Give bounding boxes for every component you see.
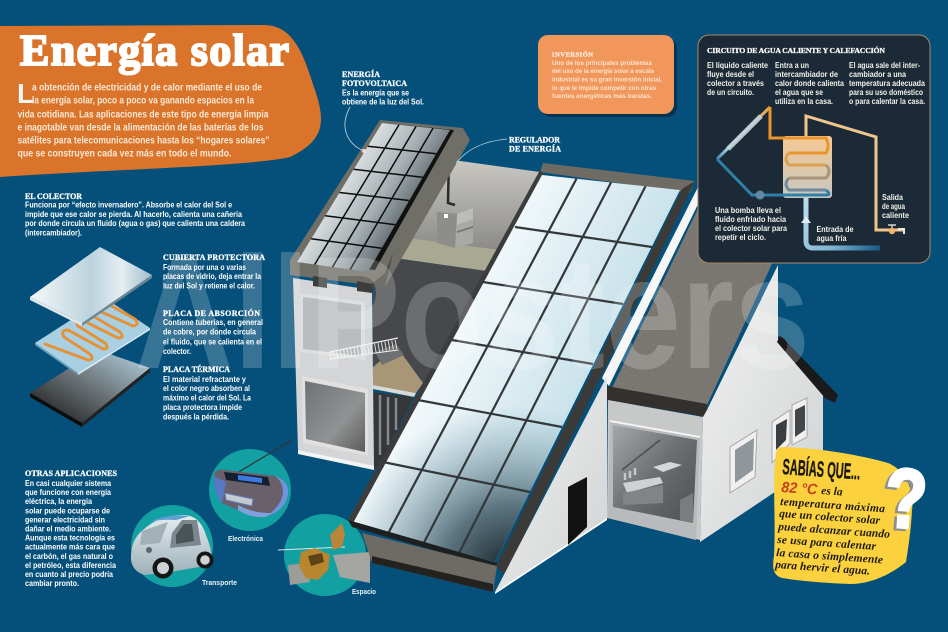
circuit diagram	[717, 107, 904, 248]
text block: otras aplicaciones: generar electricidad sin	[25, 515, 105, 524]
placa de absorción: de cobre, por donde circula	[163, 328, 256, 336]
text block: layer descriptions	[163, 253, 265, 422]
watermark: AllPosters	[135, 223, 810, 402]
text block: el colector: impide que ese calor se pierda. Al hacerlo, calienta una cañería	[25, 210, 242, 219]
cubierta protectora	[163, 253, 265, 290]
text block: otras aplicaciones: cambiar pronto.	[25, 579, 79, 588]
intro text: L	[17, 78, 34, 109]
circuit column 1: de un circuito.	[707, 88, 754, 97]
label: transporte: Transporte	[202, 578, 237, 587]
circuit column 1: colector a través	[707, 79, 765, 88]
callout text: para hervir el agua.	[774, 559, 870, 578]
placa térmica: El material refractante y	[163, 375, 246, 384]
side windows	[730, 398, 807, 493]
circuit column 1	[707, 61, 769, 97]
callout text	[774, 485, 891, 578]
text block: otras aplicaciones: actualmente más cara que	[25, 543, 115, 552]
label: bomba: el colector solar para	[715, 224, 788, 233]
panel: inversión: fuentes energéticas más baratas.	[552, 93, 652, 100]
illustration: solar house	[290, 120, 838, 594]
text block: otras aplicaciones: el petróleo, esta diferencia	[25, 561, 116, 570]
intro text: vida cotidiana. Las aplicaciones de este tipo de energía limpia	[18, 110, 269, 120]
callout: energía fotovoltaica	[342, 69, 424, 153]
large solar roof	[348, 163, 695, 592]
circuit column 3	[849, 61, 926, 106]
placa térmica: placa protectora impide	[163, 403, 242, 412]
cubierta protectora: luz del Sol y retiene el calor.	[163, 282, 255, 290]
panel: inversión: INVERSIÓN	[552, 50, 593, 58]
cubierta protectora: CUBIERTA PROTECTORA	[163, 253, 265, 262]
label: salida de agua caliente: Salida	[882, 193, 904, 202]
callout text: es la	[821, 485, 843, 499]
circuit column 2: Entra a un	[775, 61, 809, 70]
label: salida de agua caliente: caliente	[882, 211, 910, 220]
circuit column 2: utiliza en la casa.	[775, 97, 833, 106]
intro text: que se construyen cada vez más en todo el mundo.	[18, 148, 232, 160]
placa de absorción	[163, 308, 263, 356]
panel: inversión: Uno de los principales problemas	[552, 60, 652, 67]
application: electronics radio	[209, 440, 292, 531]
circuit column 1: fluye desde el	[707, 70, 754, 79]
callout text: la casa o simplemente	[776, 547, 883, 566]
question mark shadow: ?	[879, 453, 927, 549]
callout: energía fotovoltaica: obtiene de la luz del Sol.	[342, 98, 424, 106]
intro text	[17, 78, 270, 160]
cubierta protectora: Formada por una o varias	[163, 263, 246, 272]
text block: otras aplicaciones: En casi cualquier sistema	[25, 479, 111, 488]
circuit column 3: cambiador a una	[849, 70, 907, 79]
question mark: ?	[882, 451, 930, 547]
placa de absorción: colector.	[163, 347, 191, 356]
panel: inversión: lo que le impide competir con otras	[552, 85, 656, 92]
placa de absorción: Contiene tuberías, en general	[163, 318, 263, 327]
callout text: temperatura máxima	[780, 496, 886, 515]
cubierta protectora: placas de vidrio, deja entrar la	[163, 272, 261, 281]
walls and door	[495, 265, 838, 594]
intro text: la energía solar, poco a poco va ganando espacios en la	[32, 96, 254, 106]
callout: energía fotovoltaica: Es la energía que se	[342, 88, 409, 98]
placa térmica: después la pérdida.	[163, 412, 229, 422]
text block: otras aplicaciones: Aunque esta tecnología es	[25, 534, 115, 543]
label: bomba	[715, 206, 788, 242]
callout: regulador de energía: REGULADOR	[509, 136, 560, 144]
placa de absorción: el fluido, que se calienta en el	[163, 338, 262, 346]
intro text: e inagotable van desde la alimentación de las baterías de los	[18, 122, 264, 134]
label: electrónica: Electrónica	[228, 534, 264, 543]
kitchen window	[608, 420, 700, 540]
placa de absorción: PLACA DE ABSORCIÓN	[163, 308, 260, 318]
callout text: se usa para calentar	[776, 534, 877, 553]
label: salida de agua caliente	[882, 193, 910, 220]
panel: inversión: del uso de la energía solar a escala	[552, 68, 654, 75]
label: entrada de agua fría: agua fría	[816, 234, 847, 243]
circuit column 1: El líquido caliente	[707, 61, 769, 70]
protective cover	[30, 247, 152, 326]
text block: otras aplicaciones: dañar el medio ambiente.	[25, 524, 111, 534]
label: salida de agua caliente: de agua	[882, 202, 906, 211]
placa térmica: PLACA TÉRMICA	[163, 364, 230, 374]
left wall with windows	[293, 278, 374, 470]
callout text: que un colector solar	[779, 508, 881, 527]
text block: otras aplicaciones: que funcione con energía	[25, 488, 111, 497]
circuit column 3: temperatura adecuada	[849, 79, 926, 88]
circuit column 3: El agua sale del inter-	[849, 61, 920, 70]
panel: circuito de agua caliente	[698, 35, 930, 263]
text block: otras aplicaciones: en cuanto al precio podría	[25, 570, 113, 579]
callout text: puede alcanzar cuando	[777, 521, 891, 541]
panel: inversión: industrial es su gran inversión inicial,	[552, 76, 662, 84]
circuit column 2: el agua que se	[775, 88, 824, 97]
text block: otras aplicaciones: OTRAS APLICACIONES	[25, 469, 118, 478]
text block: el colector: (intercambiador).	[25, 228, 82, 238]
callout: regulador de energía	[456, 136, 561, 163]
circuit title: CIRCUITO DE AGUA CALIENTE Y CALEFACCIÓN	[707, 45, 885, 55]
application: transport car	[131, 505, 214, 587]
label: bomba: repetir el ciclo.	[715, 233, 766, 242]
callout: energía fotovoltaica: FOTOVOLTAICA	[342, 79, 407, 88]
callout: energía fotovoltaica: ENERGÍA	[342, 69, 380, 79]
absorption plate with coil	[35, 298, 150, 375]
placa térmica	[163, 364, 251, 422]
small photovoltaic roof	[290, 120, 470, 293]
placa térmica: el color negro absorben al	[163, 384, 250, 393]
title: Energía solar	[20, 26, 289, 75]
panel: title and introduction	[0, 25, 321, 177]
application: space satellite	[278, 514, 370, 596]
diagram: collector layers	[30, 247, 152, 427]
text block: el colector	[25, 192, 245, 238]
panel: inversión	[538, 35, 677, 117]
label: espacio: Espacio	[352, 587, 376, 596]
sabías que heading: SABÍAS QUE...	[782, 454, 861, 484]
text block: otras aplicaciones: eléctrica, la energía	[25, 497, 92, 506]
circuit column 2	[775, 61, 845, 106]
circuit column 2: calor donde calienta	[775, 79, 845, 88]
interior cutaway	[373, 160, 540, 468]
intro text: satélites para telecomunicaciones hasta los “hogares solares”	[18, 136, 270, 146]
temperature: 82 °C	[781, 479, 819, 499]
callout: regulador de energía: DE ENERGÍA	[509, 144, 561, 154]
grey side roof	[602, 187, 805, 417]
text block: el colector: por donde circula un fluido (agua o gas) que calienta una caldera	[25, 219, 245, 228]
text block: otras aplicaciones: solar puede ocuparse de	[25, 506, 110, 515]
label: bomba: fluido enfriado hacia	[715, 215, 787, 224]
text block: el colector: Funciona por “efecto invernadero”. Absorbe el calor del Sol e	[25, 200, 232, 210]
label: entrada de agua fría	[816, 225, 854, 243]
text block: otras aplicaciones: el carbón, el gas natural o	[25, 552, 113, 561]
text block: otras aplicaciones	[25, 469, 118, 588]
label: entrada de agua fría: Entrada de	[816, 225, 854, 234]
placa térmica: máximo el calor del Sol. La	[163, 394, 251, 402]
thermal plate	[30, 350, 150, 427]
circuit column 2: intercambiador de	[775, 70, 839, 79]
regulator pipe and box	[437, 155, 473, 248]
intro text: a obtención de electricidad y de calor mediante el uso de	[32, 82, 262, 94]
callout: sabías que	[773, 447, 930, 584]
label: bomba: Una bomba lleva el	[715, 206, 781, 215]
circuit column 3: o para calentar la casa.	[849, 97, 925, 106]
balcony railing	[330, 338, 398, 359]
text block: el colector: EL COLECTOR	[25, 192, 82, 201]
circuit column 3: para su uso doméstico	[849, 88, 923, 97]
